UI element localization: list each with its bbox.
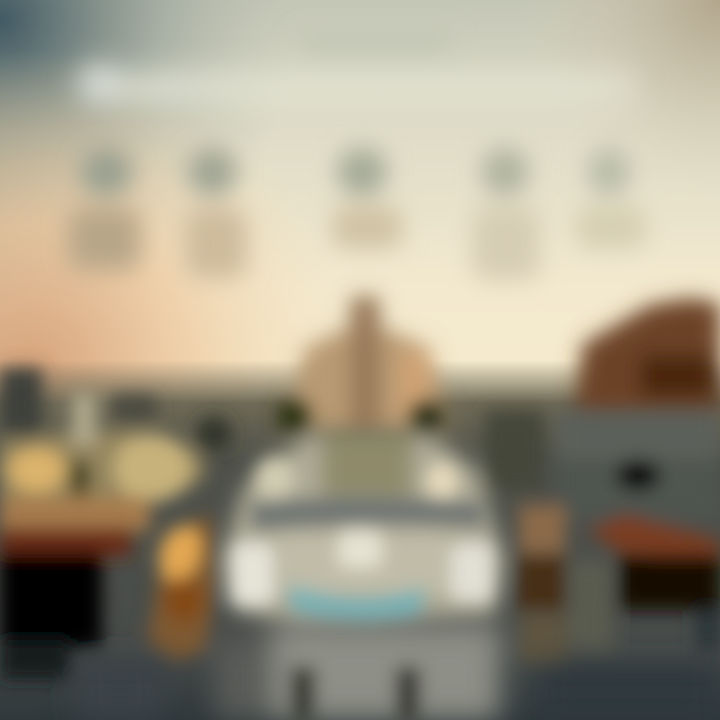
right quay and boat [517,410,720,662]
left skyline blocks [0,368,156,434]
heading band [78,38,635,104]
lower water tint [75,660,720,720]
orange oar and hull left of ship [148,515,215,660]
column 2 [185,148,246,278]
column 1 [68,148,140,270]
five info columns [68,148,646,280]
central white ship [215,432,505,720]
column 4 [472,148,540,280]
column 3 [332,148,402,248]
right building [575,298,720,415]
ground base [0,360,720,720]
ship blue waterline [288,586,425,621]
ship body [222,432,505,625]
column 5 [576,148,646,248]
ship window band [250,498,484,530]
reflection dark posts [292,668,419,720]
ship lower white panels [230,530,494,606]
ship upper highlights [254,456,458,502]
central palace silhouette [285,296,448,431]
left boat [0,392,205,680]
lower scene [0,296,720,720]
ship reflection [215,625,500,720]
dark trees on quay [196,399,545,490]
